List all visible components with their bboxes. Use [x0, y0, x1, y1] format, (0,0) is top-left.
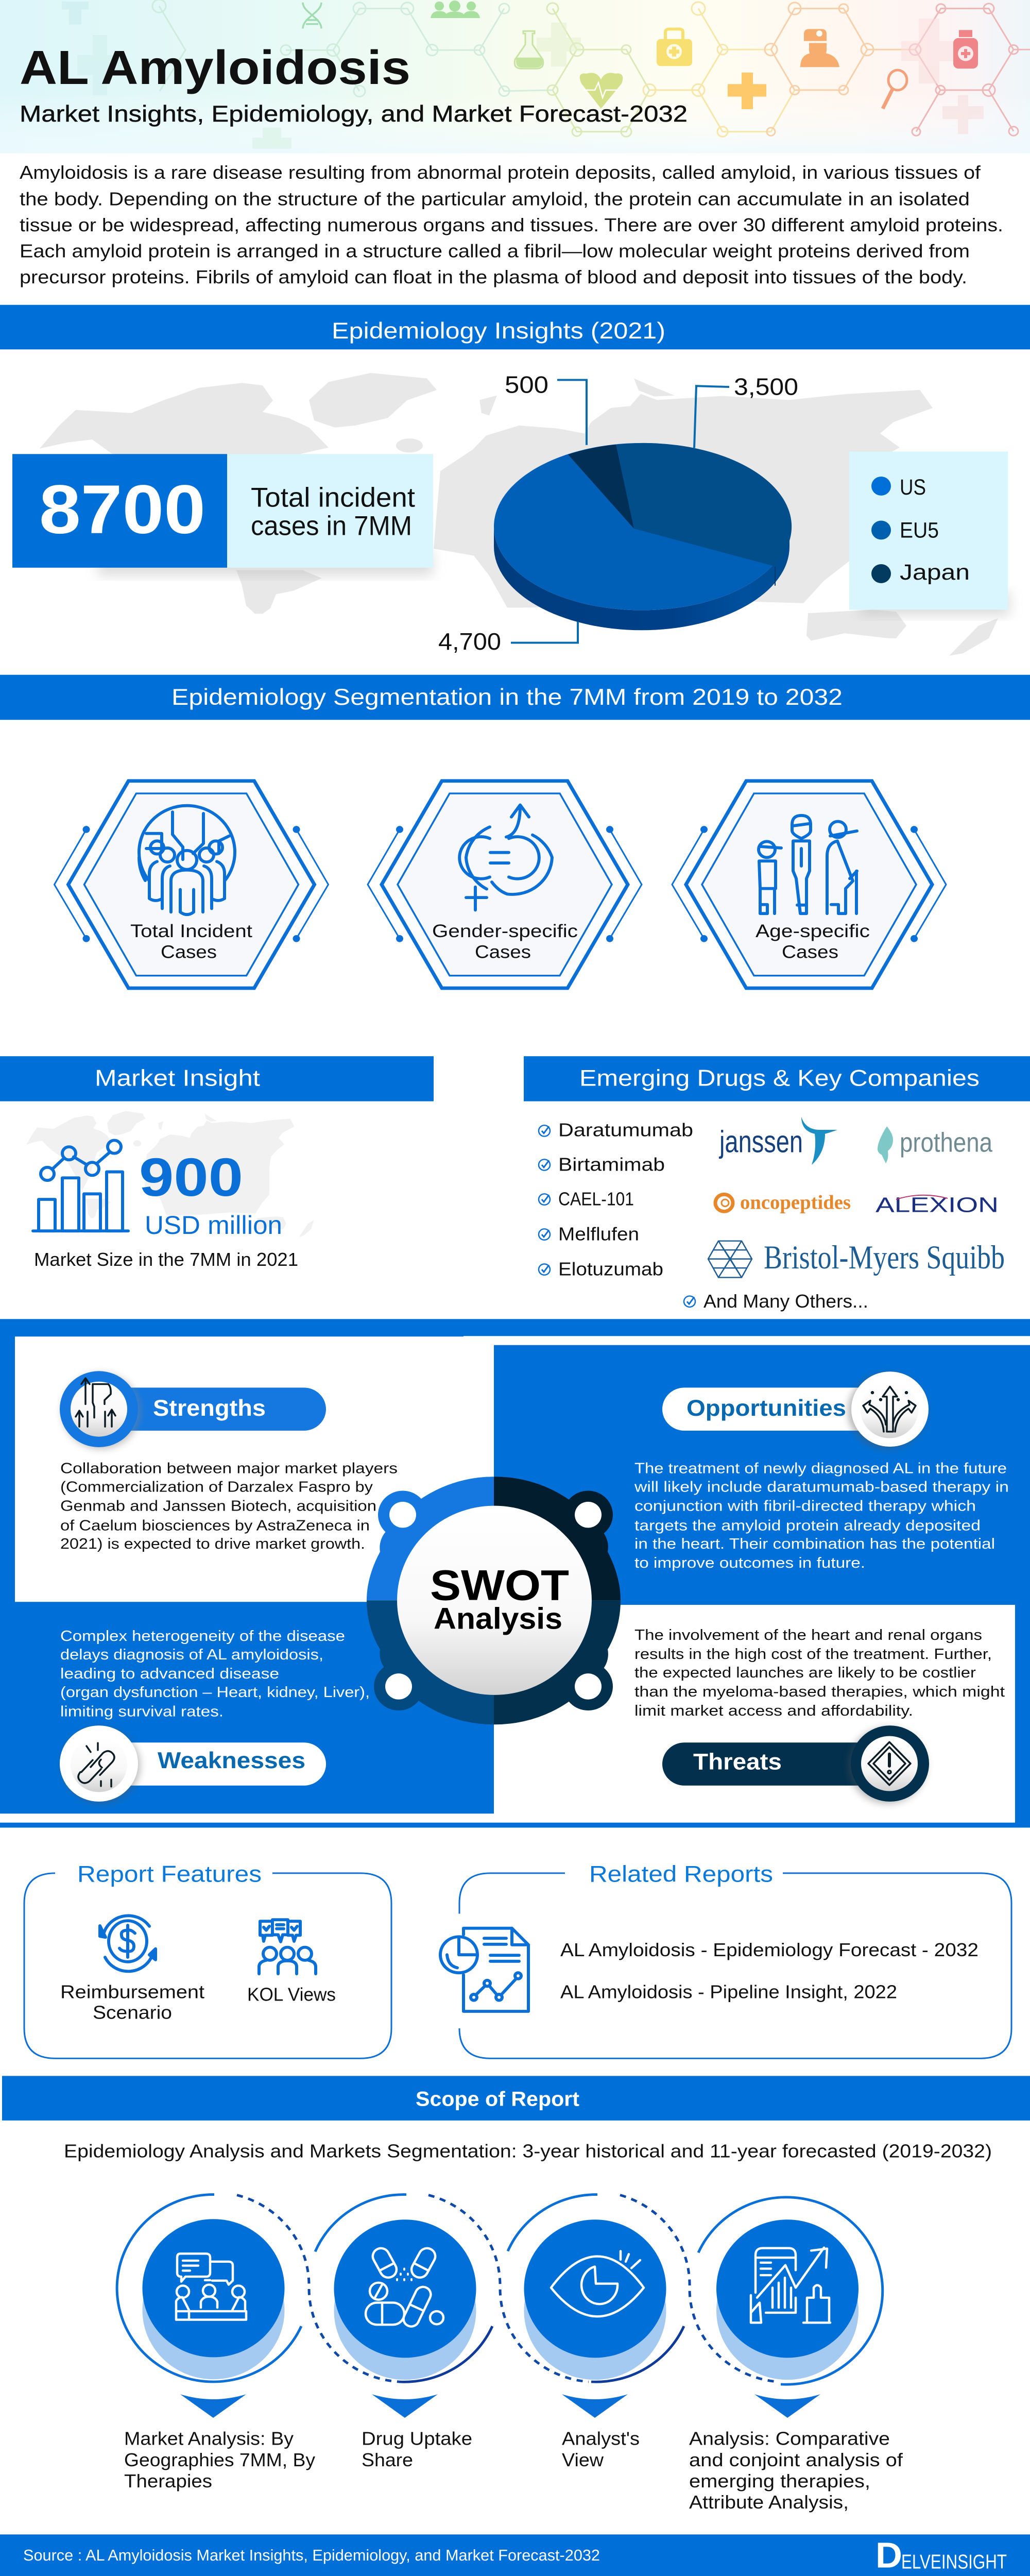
icon: discussion group [176, 2253, 246, 2320]
pie legend: US [900, 476, 926, 500]
scope item: Comparative Analysis: and conjoint analysis of [689, 2450, 903, 2470]
scope item: Market Analysis: Market Analysis: By [124, 2428, 294, 2449]
logo: Oncopeptides: oncopeptides [740, 1191, 851, 1213]
section band: Epidemiology Insights [0, 305, 1030, 349]
panel: Threats [494, 1605, 1015, 1823]
section band: Market Insight [0, 1056, 434, 1101]
logo: DelveInsight [876, 2535, 1007, 2575]
intro paragraph: Amyloidosis is a rare disease resulting from abnormal protein deposits, called amyloid, in various tissues of [20, 162, 981, 183]
hub quadrant: top right [494, 1477, 621, 1600]
Weaknesses text: (organ dysfunction – Heart, kidney, Liver), [60, 1684, 370, 1701]
Strengths text [60, 1460, 398, 1552]
Strengths text: (Commercialization of Darzalex Faspro by [60, 1479, 373, 1495]
icon: globe with people [139, 806, 235, 914]
section band: Epidemiology Segmentation: Epidemiology Segmentation in the 7MM from 2019 to 2032 [171, 684, 843, 710]
hub quadrant: top left [367, 1477, 494, 1600]
logo: Janssen: janssen [718, 1124, 803, 1159]
panel: Opportunities top edge [464, 1336, 1030, 1345]
section band: Emerging Drugs and Key Companies: Emerging Drugs & Key Companies [579, 1065, 980, 1091]
mini world map [26, 1111, 314, 1237]
scope item: Drug Uptake Share: Drug Uptake [362, 2428, 472, 2449]
incident cases callout [12, 454, 433, 575]
footer: Source : AL Amyloidosis Market Insights, Epidemiology, and Market Forecast-2032 [23, 2547, 600, 2564]
intro paragraph: the body. Depending on the structure of the particular amyloid, the protein can accumulate in an isolated [20, 189, 970, 209]
network pattern [152, 0, 1030, 137]
panel: Report Features: KOL Views [247, 1984, 336, 2005]
panel: Weaknesses bottom edge [0, 1814, 494, 1823]
panel: Report Features: Scenario [93, 2002, 172, 2023]
Weaknesses text: delays diagnosis of AL amyloidosis, [60, 1646, 323, 1663]
Strengths text: Collaboration between major market players [60, 1460, 398, 1477]
title: AL Amyloidosis [20, 41, 410, 95]
Weaknesses badge [60, 1725, 326, 1804]
Strengths badge: Strengths [153, 1395, 266, 1421]
SWOT background [0, 1319, 1030, 1827]
Weaknesses text: leading to advanced disease [60, 1665, 279, 1682]
world map background [40, 373, 998, 656]
Opportunities text: conjunction with fibril-directed therapy which [634, 1498, 976, 1514]
market insight panel: USD million [145, 1211, 282, 1240]
emerging drugs list: Birtamimab [558, 1154, 665, 1175]
icon: pills [366, 2245, 443, 2329]
hexagon: Gender-specific Cases: Cases [475, 942, 531, 962]
down marker [562, 2394, 628, 2418]
icon: KOL views [259, 1920, 316, 1974]
Strengths text: of Caelum biosciences by AstraZeneca in [60, 1517, 370, 1534]
Weaknesses text [60, 1628, 370, 1720]
scope item: Market Analysis [124, 2219, 316, 2492]
icon: heart [580, 73, 623, 109]
scope item: Market Analysis: Therapies [124, 2471, 212, 2492]
SWOT label: SWOT [430, 1561, 569, 1609]
intro paragraph [20, 162, 1003, 287]
incident cases callout: Total incident [251, 483, 415, 513]
intro paragraph: tissue or be widespread, affecting numerous organs and tissues. There are over 30 different amyloid proteins. [20, 214, 1003, 235]
scope item: Comparative Analysis: emerging therapies, [689, 2471, 870, 2492]
icon: branching arrows [863, 1386, 916, 1432]
Opportunities text [634, 1460, 1009, 1571]
scope item: Comparative Analysis [689, 2219, 903, 2513]
footer [0, 2534, 1030, 2576]
scope summary: Epidemiology Analysis and Markets Segmentation: 3-year historical and 11-year forecasted (2019-2032) [64, 2141, 992, 2162]
pie legend: EU5 [900, 518, 939, 543]
emerging drugs list: Daratumumab [558, 1120, 693, 1140]
Threats text: The involvement of the heart and renal organs [634, 1626, 982, 1643]
Threats badge: Threats [693, 1749, 782, 1775]
market size caption: Market Size in the 7MM in 2021 [34, 1249, 298, 1270]
icon: phone, rising arrow and hands [751, 2248, 830, 2323]
section band: Scope of Report [2, 2076, 1030, 2121]
intro paragraph: Each amyloid protein is arranged in a structure called a fibril—low molecular weight proteins derived from [20, 241, 970, 261]
hub quadrant: bottom right [494, 1600, 621, 1724]
section band: Emerging Drugs and Key Companies [524, 1056, 1030, 1101]
icon: eye with pie [551, 2251, 644, 2316]
section band: Epidemiology Segmentation [0, 675, 1030, 720]
scope connector rings [117, 2195, 883, 2384]
icon: magnifier [883, 70, 907, 109]
header banner [0, 0, 1030, 153]
Strengths text: 2021) is expected to drive market growth. [60, 1536, 365, 1552]
pie label leaders and values: 500 [505, 371, 548, 399]
Opportunities text: The treatment of newly diagnosed AL in the future [634, 1460, 1007, 1477]
scope item: Comparative Analysis: Analysis: Comparative [689, 2428, 890, 2449]
pie slice: EU5 [616, 443, 792, 566]
logo: Prothena: prothena [900, 1128, 992, 1158]
label: Age-specific [756, 921, 870, 941]
logo: Alexion: ALEXION [876, 1193, 999, 1216]
icon: broken chain [78, 1743, 114, 1787]
section band: Market Insight: Market Insight [95, 1065, 260, 1091]
scope item: Analyst's View: View [562, 2450, 604, 2470]
icon: warning diamond [868, 1742, 911, 1785]
Threats text: the expected launches are likely to be costlier [634, 1664, 976, 1681]
hexagon: Gender-specific Cases [368, 781, 642, 988]
icon: bar and line chart [33, 1140, 128, 1231]
hexagon: Total Incident Cases [55, 781, 329, 988]
market value: 900 [139, 1147, 243, 1208]
logo: Janssen [718, 1117, 837, 1165]
market insight panel [26, 1111, 314, 1270]
intro paragraph: precursor proteins. Fibrils of amyloid can float in the plasma of blood and deposit into tissues of the body. [20, 266, 967, 287]
panel: Strengths [15, 1336, 494, 1602]
icon: doctor [800, 29, 839, 67]
Opportunities text: to improve outcomes in future. [634, 1555, 865, 1571]
panel: Report Features: Report Features [77, 1861, 262, 1887]
hexagon: Age-specific Cases [672, 781, 946, 988]
logo: Prothena [878, 1126, 992, 1163]
label: Gender-specific [432, 921, 578, 941]
Strengths text: Genmab and Janssen Biotech, acquisition [60, 1498, 376, 1514]
down marker [180, 2394, 246, 2418]
pie legend [849, 451, 1009, 616]
pie chart [494, 443, 792, 630]
faded crosses [62, 2, 984, 149]
icon: report document [440, 1928, 528, 2011]
Opportunities badge: Opportunities [686, 1395, 846, 1421]
down marker [754, 2394, 820, 2418]
pie slice: Japan [568, 445, 634, 529]
icon: DNA [303, 3, 321, 28]
icon: flask [514, 31, 543, 69]
section band: Scope of Report: Scope of Report [416, 2087, 579, 2111]
Opportunities text: will likely include daratumumab-based therapy in [634, 1479, 1009, 1495]
emerging drugs list: CAEL-101 [558, 1189, 634, 1210]
icon: gender symbols [459, 805, 552, 910]
hub quadrant: bottom left [367, 1600, 494, 1724]
label: Total Incident [130, 921, 252, 941]
Weaknesses text: limiting survival rates. [60, 1703, 224, 1720]
SWOT centre hub: Analysis [434, 1601, 562, 1635]
panel: Related Reports [440, 1861, 1011, 2058]
emerging drugs list: And Many Others... [703, 1291, 868, 1312]
emerging drugs list: Melflufen [558, 1224, 639, 1245]
pie label leaders and values [438, 371, 798, 655]
Threats badge [662, 1725, 929, 1804]
incident cases callout: 8700 [39, 471, 205, 548]
Threats text: limit market access and affordability. [634, 1702, 913, 1719]
down marker [372, 2394, 438, 2418]
panel: Report Features: Reimbursement [60, 1981, 204, 2003]
subtitle: Market Insights, Epidemiology, and Market Forecast-2032 [20, 101, 688, 127]
Opportunities text: in the heart. Their combination has the potential [634, 1536, 995, 1552]
Weaknesses badge: Weaknesses [158, 1747, 305, 1773]
scope item: Market Analysis: Geographies 7MM, By [124, 2450, 316, 2470]
emerging drugs list: Elotuzumab [558, 1259, 663, 1280]
Threats text: than the myeloma-based therapies, which might [634, 1683, 1005, 1700]
panel: Report Features [24, 1861, 391, 2058]
Threats text [634, 1626, 1005, 1719]
scope item: Analyst's View: Analyst's [562, 2428, 640, 2449]
SWOT centre hub [367, 1477, 621, 1724]
icon: people [431, 1, 480, 18]
hexagon: Age-specific Cases: Cases [782, 942, 838, 962]
icon: medical bag [657, 29, 692, 66]
icon: people of different ages [759, 816, 857, 913]
icon: fist and arrows [76, 1378, 115, 1427]
pie label leaders and values: 4,700 [438, 629, 501, 655]
Opportunities badge [662, 1371, 929, 1449]
hexagon: Total Incident Cases: Cases [161, 942, 217, 962]
Weaknesses text: Complex heterogeneity of the disease [60, 1628, 345, 1645]
section band: Epidemiology Insights: Epidemiology Insights (2021) [332, 317, 665, 344]
logo: DelveInsight: D [876, 2535, 902, 2575]
pie legend: Japan [900, 561, 970, 585]
pie label leaders and values: 3,500 [734, 374, 798, 400]
scope item: Drug Uptake Share [334, 2219, 476, 2470]
Strengths badge [60, 1371, 326, 1449]
incident cases callout: cases in 7MM [251, 511, 412, 541]
icon: reimbursement cycle [100, 1916, 156, 1971]
scope item: Comparative Analysis: Attribute Analysis, [689, 2492, 849, 2513]
panel: Related Reports: Related Reports [589, 1861, 773, 1887]
icon: bottle [953, 30, 978, 69]
scope item: Analyst's View [524, 2219, 666, 2470]
emerging drugs list [539, 1120, 868, 1312]
scope item: Drug Uptake Share: Share [362, 2450, 413, 2470]
Threats text: results in the high cost of the treatment. Further, [634, 1646, 992, 1663]
icon: flask liquid [516, 58, 543, 67]
icon: plus [728, 73, 766, 109]
panel: Related Reports: AL Amyloidosis - Pipeline Insight, 2022 [560, 1981, 897, 2003]
Opportunities text: targets the amyloid protein already deposited [634, 1517, 981, 1534]
panel: Related Reports: AL Amyloidosis - Epidemiology Forecast - 2032 [560, 1940, 978, 1960]
